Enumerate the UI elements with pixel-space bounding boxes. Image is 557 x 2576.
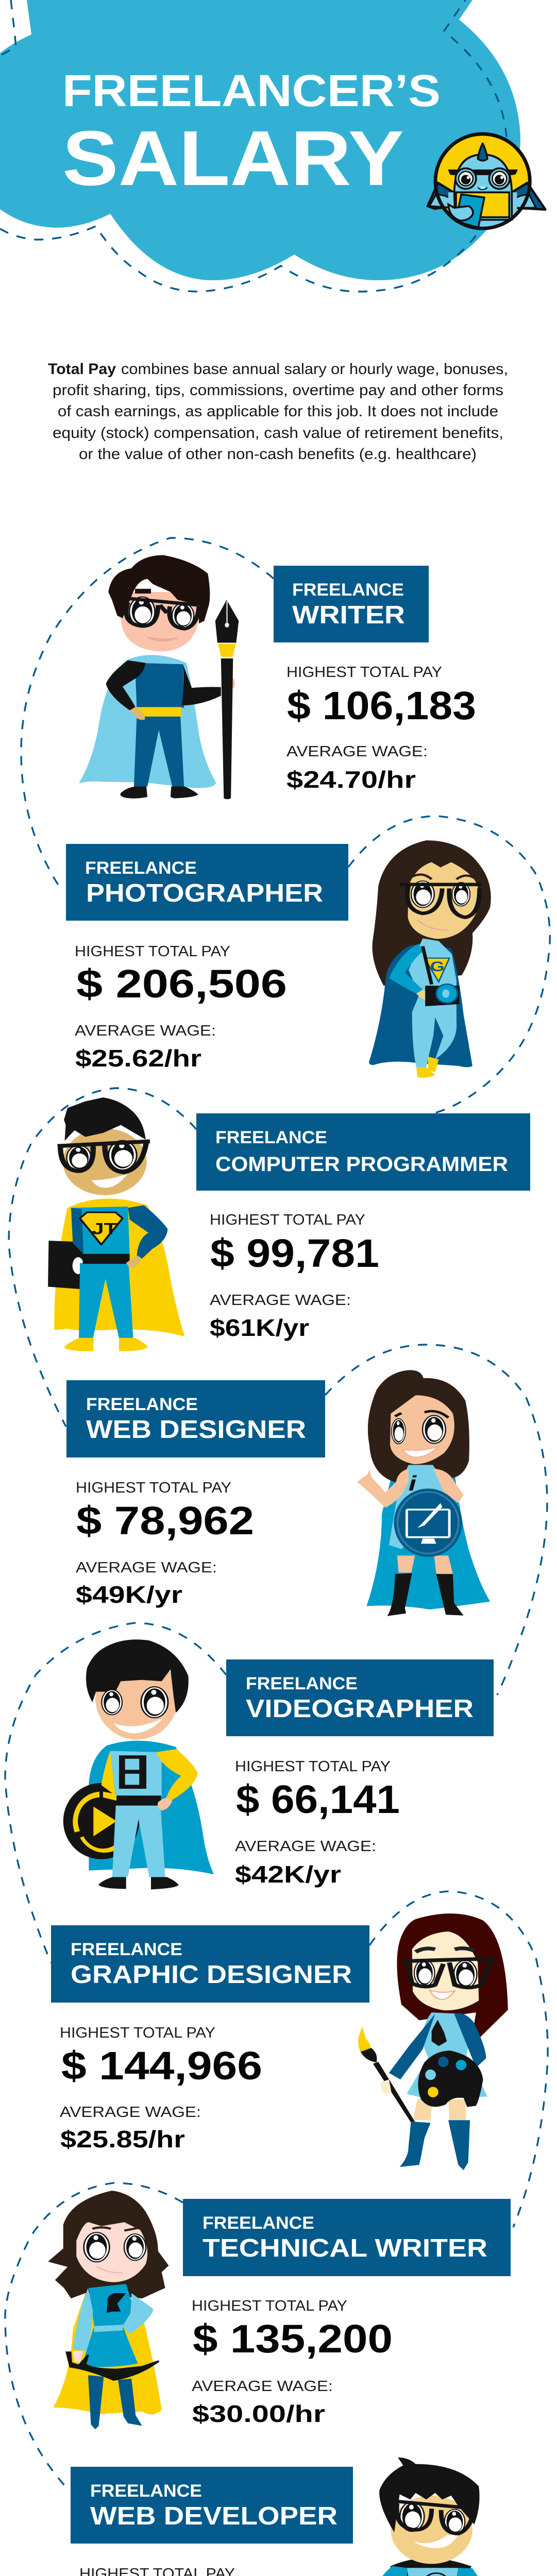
- panel: freelance web developer: WEB DEVELOPER: [90, 2502, 337, 2530]
- stats: [60, 2025, 262, 2153]
- stats: $ 144,966: [61, 2044, 262, 2088]
- character: web designer: [357, 1370, 490, 1616]
- dashed connector: technical writer to web developer: [5, 2183, 183, 2490]
- title: SALARY: [62, 114, 404, 201]
- character: writer: [79, 555, 239, 799]
- panel: freelance web developer: FREELANCE: [90, 2481, 202, 2501]
- stats: AVERAGE WAGE:: [235, 1838, 376, 1855]
- character: videographer: [63, 1639, 214, 1889]
- stats: HIGHEST TOTAL PAY: [76, 1480, 231, 1496]
- stats: $30.00/hr: [192, 2400, 325, 2427]
- intro paragraph: combines base annual salary or hourly wage, bonuses,: [121, 361, 508, 378]
- panel: freelance writer: WRITER: [292, 601, 405, 629]
- dashed connector: programmer to web designer: [9, 1088, 196, 1427]
- title box: [183, 2199, 511, 2276]
- dashed connector: writer to photographer: [21, 538, 274, 891]
- title box: [226, 1659, 494, 1736]
- stats: $ 106,183: [287, 684, 476, 728]
- stats: AVERAGE WAGE:: [192, 2378, 333, 2395]
- dashed connector: graphic designer to technical writer: [369, 1891, 548, 2227]
- stats: $ 66,141: [236, 1777, 400, 1822]
- stats: $ 135,200: [193, 2317, 393, 2361]
- panel: freelance graphic designer: FREELANCE: [71, 1940, 182, 1959]
- stats: $49K/yr: [76, 1581, 182, 1608]
- panel: freelance computer programmer: COMPUTER PROGRAMMER: [215, 1153, 508, 1176]
- title box: [71, 2467, 353, 2544]
- stats: HIGHEST TOTAL PAY: [235, 1758, 391, 1775]
- panel: freelance technical writer: TECHNICAL WRITER: [202, 2234, 487, 2262]
- stats: AVERAGE WAGE:: [210, 1292, 351, 1309]
- panel: freelance web designer: WEB DESIGNER: [86, 1416, 306, 1444]
- title box: [66, 844, 348, 921]
- character: computer programmer: JT: [92, 1219, 117, 1238]
- stats: $25.85/hr: [60, 2126, 185, 2153]
- stats: [210, 1212, 379, 1341]
- panel: freelance graphic designer: [51, 1913, 508, 2170]
- stats: [76, 1480, 254, 1608]
- stats: $ 206,506: [76, 962, 287, 1006]
- panel: freelance technical writer: FREELANCE: [202, 2213, 314, 2233]
- panel: freelance videographer: FREELANCE: [246, 1674, 358, 1693]
- panel: freelance web designer: FREELANCE: [86, 1395, 198, 1414]
- stats: $ 78,962: [76, 1499, 254, 1543]
- stats: HIGHEST TOTAL PAY: [75, 943, 230, 960]
- panel: freelance technical writer: [48, 2191, 511, 2429]
- stats: [192, 2298, 393, 2427]
- panel: freelance photographer: PHOTOGRAPHER: [86, 879, 323, 907]
- character: photographer: [369, 840, 491, 1078]
- character: web designer: i: [409, 1472, 417, 1495]
- dashed connector: photographer to programmer: [348, 816, 550, 1113]
- intro paragraph: profit sharing, tips, commissions, overtime pay and other forms: [53, 382, 503, 399]
- panel: freelance writer: [79, 555, 476, 799]
- character: photographer: G: [430, 959, 445, 974]
- stats: AVERAGE WAGE:: [76, 1560, 217, 1576]
- stats: $25.62/hr: [75, 1045, 201, 1072]
- panel: freelance videographer: VIDEOGRAPHER: [246, 1695, 474, 1723]
- stats: HIGHEST TOTAL PAY: [192, 2298, 347, 2314]
- title: [62, 66, 441, 201]
- stats: [75, 943, 287, 1072]
- panel: freelance web designer: [66, 1370, 490, 1616]
- title: FREELANCER’S: [62, 66, 441, 116]
- hero mascot badge: [428, 134, 545, 230]
- stats: HIGHEST TOTAL PAY: [60, 2025, 215, 2041]
- intro paragraph: [48, 361, 508, 463]
- stats: $42K/yr: [235, 1861, 341, 1888]
- panel: freelance writer: FREELANCE: [292, 580, 404, 600]
- character: web developer: [361, 2458, 486, 2576]
- panel: freelance photographer: FREELANCE: [85, 858, 197, 878]
- title box: [51, 1925, 369, 2003]
- character: computer programmer: [48, 1097, 184, 1351]
- panel: freelance computer programmer: FREELANCE: [215, 1128, 327, 1147]
- hero cloud: [0, 0, 520, 280]
- character: technical writer: [48, 2191, 168, 2429]
- stats: $24.70/hr: [286, 766, 416, 793]
- intro paragraph: Total Pay: [48, 361, 116, 378]
- stats: HIGHEST TOTAL PAY: [286, 664, 442, 681]
- stats: $ 99,781: [210, 1231, 379, 1276]
- intro paragraph: or the value of other non-cash benefits (e.g. healthcare): [79, 446, 477, 463]
- stats: HIGHEST TOTAL PAY: [210, 1212, 365, 1228]
- panel: freelance graphic designer: GRAPHIC DESIGNER: [71, 1961, 352, 1989]
- stats: [286, 664, 476, 793]
- stats: AVERAGE WAGE:: [286, 743, 428, 760]
- intro paragraph: equity (stock) compensation, cash value of retirement benefits,: [53, 425, 503, 442]
- title box: [274, 566, 429, 642]
- stats: AVERAGE WAGE:: [75, 1023, 216, 1039]
- intro paragraph: of cash earnings, as applicable for this job. It does not include: [58, 403, 498, 420]
- title box: [196, 1113, 530, 1191]
- dashed connector: videographer to graphic designer: [5, 1623, 226, 1963]
- stats: $61K/yr: [210, 1314, 309, 1341]
- panel: freelance videographer: [63, 1639, 494, 1889]
- panel: freelance computer programmer: [48, 1097, 530, 1351]
- stats: [235, 1758, 400, 1888]
- dashed connector: web designer to videographer: [325, 1345, 547, 1695]
- panel: freelance web developer: [71, 2458, 486, 2576]
- character: graphic designer: [358, 1913, 508, 2170]
- panel: freelance photographer: [66, 840, 491, 1078]
- title box: [66, 1380, 325, 1458]
- stats: AVERAGE WAGE:: [60, 2104, 201, 2121]
